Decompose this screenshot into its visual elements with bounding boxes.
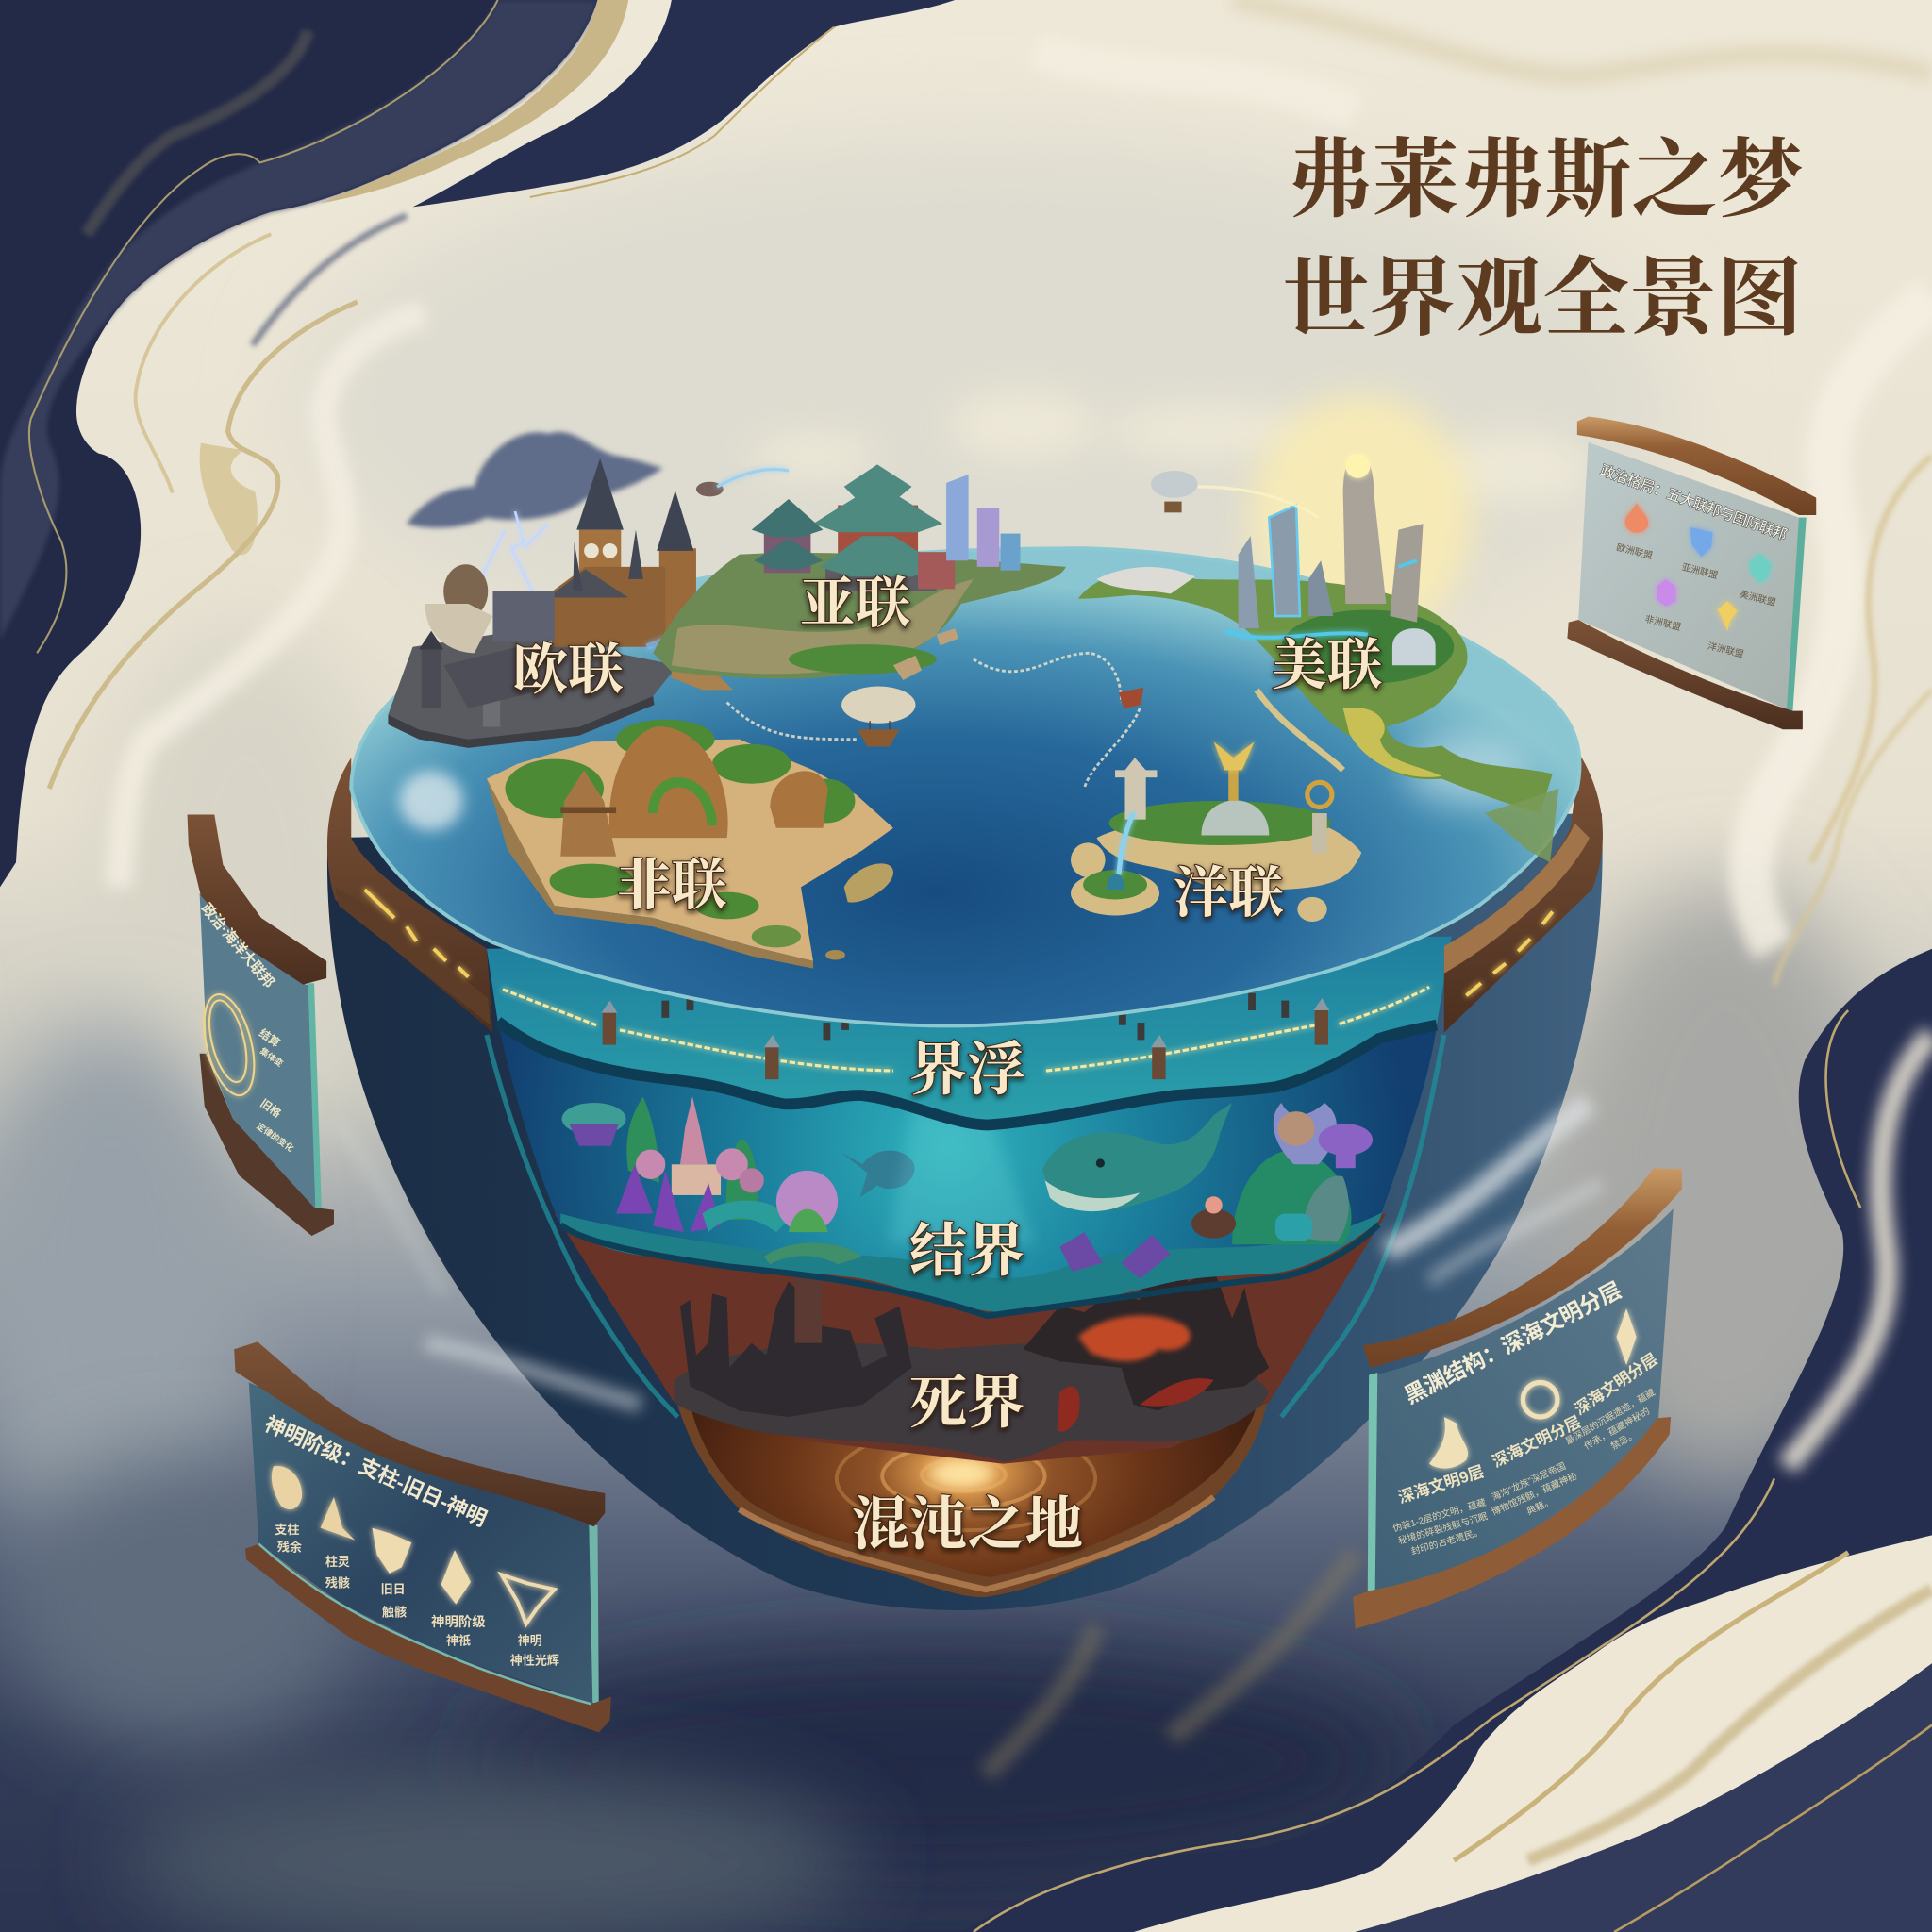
- divine panel heading: 神明阶级：支柱-旧日-神明: [261, 1412, 491, 1531]
- rank labels: 神祇: [446, 1634, 471, 1648]
- wooden ring right: [1444, 754, 1603, 1033]
- abyss body text: 禁忌。: [1609, 1428, 1639, 1453]
- abyss body text: 海沟“龙族”深层帝国: [1490, 1459, 1568, 1503]
- faction labels: 洋洲联盟: [1707, 640, 1745, 660]
- abyss icon: wave creature: [1429, 1417, 1468, 1469]
- faction labels: 美洲联盟: [1739, 588, 1777, 608]
- world sphere body: [327, 813, 1603, 1610]
- panel: left federation: [188, 814, 334, 1236]
- layer: chaos land: [674, 1392, 1269, 1597]
- faction labels: 亚洲联盟: [1680, 561, 1720, 581]
- league and layer labels: 欧联: [512, 640, 624, 701]
- league and layer labels: 洋联: [1173, 863, 1284, 924]
- sea glints and cloud: [399, 736, 1528, 830]
- league and layer labels: 美联: [1272, 635, 1382, 696]
- abyss body text: 典籍。: [1524, 1495, 1555, 1517]
- statues and monuments: [1115, 741, 1332, 853]
- glow behind the America skyline: [1251, 394, 1473, 641]
- left panel ring diagram: [195, 990, 263, 1101]
- abyss body text: 博物馆残骸，蕴藏神秘: [1490, 1469, 1579, 1518]
- volcanic peaks on the right: [1023, 1269, 1269, 1411]
- land: Africa league: [487, 720, 893, 969]
- right coral city: [1059, 1103, 1373, 1279]
- league and layer labels: 结界: [909, 1220, 1025, 1284]
- airship near America: [1151, 471, 1319, 518]
- boundary pillars: [601, 993, 1329, 1079]
- faction icon: wave: [1690, 527, 1713, 557]
- ocean surface: [351, 548, 1580, 1025]
- abyss icon: rose emblem: [1523, 1382, 1557, 1417]
- abyss panel heading: 黑渊结构：深海文明分层: [1400, 1276, 1625, 1408]
- death realm ground plate: [674, 1341, 1269, 1461]
- skyline: [1226, 454, 1436, 665]
- abyss body text: 封印的古老遗民。: [1409, 1525, 1484, 1557]
- faction icon: flame: [1625, 503, 1648, 533]
- land: Asia league: [653, 464, 1066, 680]
- ruins on the left: [680, 1269, 912, 1417]
- left panel labels: 定律的变化: [255, 1121, 296, 1154]
- rank labels: 旧日: [381, 1582, 406, 1596]
- abyss body text: 最深层的沉眠遗迹，蕴藏: [1563, 1386, 1657, 1447]
- wooden ring left: [327, 758, 492, 1033]
- left coral city: [562, 1096, 862, 1264]
- domed huts: [560, 726, 828, 857]
- rank labels: [275, 1523, 559, 1668]
- rank icon: spire: [321, 1497, 355, 1541]
- left panel labels: [255, 1026, 296, 1154]
- rising sun rays: [887, 1084, 1035, 1244]
- title: 世界观全景图: [1283, 251, 1803, 346]
- faction labels: 欧洲联盟: [1615, 541, 1654, 561]
- sky clouds behind the world: [752, 391, 1590, 506]
- storm cloud and lightning: [407, 432, 663, 591]
- rank labels: 柱灵: [325, 1555, 350, 1569]
- title: [1283, 133, 1804, 346]
- league and layer labels: 亚联: [800, 574, 910, 635]
- abyss subheads: 深海文明9层: [1396, 1461, 1487, 1507]
- panel: political structure: [1567, 416, 1816, 729]
- boundary chain lights: [503, 987, 1429, 1071]
- airship over Europe-Asia: [696, 469, 789, 496]
- faction labels: 非洲联盟: [1643, 613, 1682, 633]
- league and layer labels: [512, 574, 1382, 1557]
- league and layer labels: 混沌之地: [852, 1493, 1083, 1557]
- abyss body text: 传承，蕴藏神秘的: [1582, 1405, 1652, 1452]
- airships and trails: [696, 469, 1319, 789]
- abyss body text: 秘境的碎裂残骸与沉眠: [1397, 1509, 1490, 1547]
- layer: barrier deep sea: [498, 1022, 1437, 1316]
- rank labels: 残余: [277, 1540, 302, 1554]
- political panel heading: 政治格局：五大联邦与国际联邦: [1598, 461, 1790, 544]
- league and layer labels: 死界: [909, 1371, 1025, 1435]
- castle: [548, 458, 696, 647]
- sailing boat: [1119, 688, 1143, 708]
- rank labels: 支柱: [275, 1523, 299, 1537]
- faction labels: [1615, 541, 1777, 660]
- rank icon: star sigil: [502, 1574, 555, 1624]
- rank labels: 触骸: [382, 1606, 407, 1620]
- steam factory: [419, 564, 555, 727]
- land: Oceania league: [1071, 741, 1361, 922]
- lava pool: [1078, 1315, 1191, 1361]
- rank labels: 神明: [518, 1634, 542, 1648]
- faction icon: leaf: [1750, 553, 1772, 583]
- left panel labels: 集体变: [258, 1045, 285, 1069]
- league and layer labels: 非联: [616, 856, 727, 917]
- rank icon: pillar: [272, 1466, 302, 1509]
- land: America league: [1078, 454, 1558, 862]
- rank icon: horned eye: [372, 1528, 411, 1574]
- rank labels: 残骸: [325, 1575, 350, 1590]
- drifting fog: [333, 1103, 1602, 1405]
- airship over sea: [841, 687, 915, 747]
- abyss subheads: [1396, 1349, 1661, 1507]
- panel: abyss structure: [1353, 1168, 1682, 1629]
- glass towers: [946, 475, 1020, 571]
- sphere rock seams: [487, 1035, 1444, 1417]
- left panel heading: 政治·海洋大联邦: [197, 900, 278, 991]
- rank labels: 神明阶级: [431, 1613, 486, 1630]
- abyss subheads: 深海文明分层: [1571, 1349, 1661, 1419]
- layer: floating boundary band: [487, 937, 1452, 1124]
- abyss body text: [1391, 1386, 1671, 1560]
- layer: death realm: [555, 1214, 1386, 1464]
- small whale: [841, 1151, 915, 1198]
- left panel labels: 结算: [257, 1026, 283, 1050]
- abyss subheads: 深海文明分层: [1490, 1412, 1584, 1471]
- abyss icon: trident sigil: [1617, 1308, 1637, 1365]
- panel: divine ranks: [234, 1341, 611, 1732]
- left panel labels: 旧格: [258, 1096, 284, 1120]
- faction icon: crystal: [1657, 579, 1675, 607]
- land: Europe league: [388, 432, 752, 748]
- great whale: [1042, 1103, 1232, 1210]
- rank labels: 神性光辉: [510, 1654, 559, 1668]
- league and layer labels: 界浮: [909, 1039, 1025, 1103]
- title: 弗莱弗斯之梦: [1287, 133, 1804, 228]
- abyss body text: 伪装1-2层的文明，蕴藏: [1391, 1496, 1488, 1535]
- faction icon: star: [1718, 601, 1738, 631]
- pagodas: [752, 464, 955, 591]
- rank icon: flame crest: [441, 1550, 471, 1605]
